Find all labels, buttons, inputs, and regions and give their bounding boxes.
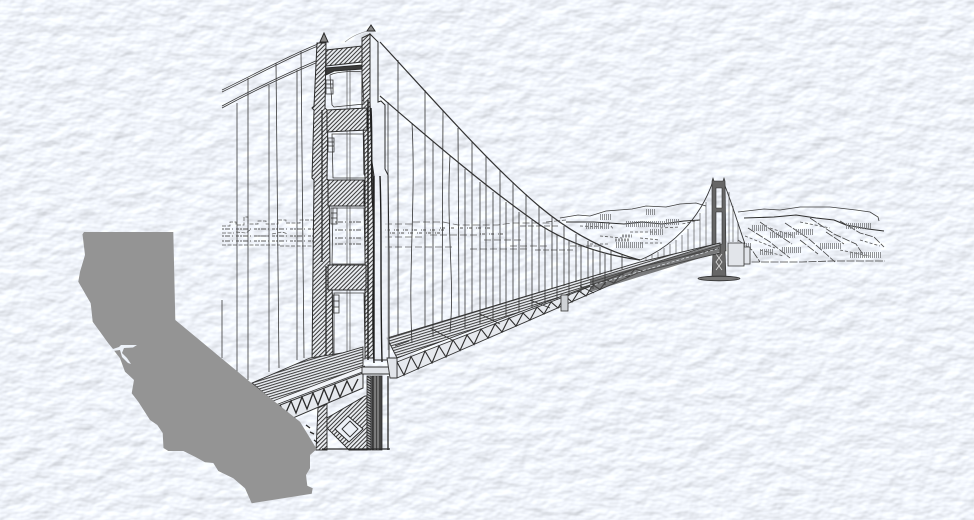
hangers — [398, 60, 622, 335]
bridge: near tower — [312, 25, 389, 365]
tower ladder details — [326, 80, 339, 313]
bridge: near deck left of tower — [252, 347, 397, 418]
bridge: tower base below deck — [306, 376, 390, 450]
tower collar at deck — [362, 367, 392, 374]
dark far deck — [590, 244, 720, 292]
far tower cables — [640, 181, 745, 260]
base right columns — [367, 376, 371, 450]
far tower legs — [710, 178, 728, 279]
window hangers — [347, 66, 350, 355]
deck continuation past tower — [387, 358, 397, 378]
upper main cable — [380, 42, 640, 260]
cross bracing — [327, 396, 367, 450]
far tower base — [698, 276, 740, 281]
deck surface — [387, 243, 720, 358]
bridge: suspension cables right of near tower — [380, 42, 640, 350]
bridge: suspension cables left of near tower — [222, 30, 372, 380]
tower strut 3 — [328, 180, 364, 206]
ground strokes — [306, 425, 390, 449]
lower main cable — [380, 96, 640, 260]
near side truss — [275, 373, 363, 418]
left lower cable — [222, 60, 318, 108]
city skyline behind the bridge — [222, 217, 600, 250]
tower inner dark lines — [368, 100, 382, 363]
mid deck pier joint — [561, 295, 568, 311]
left tower leg — [312, 43, 333, 365]
tower strut 1 — [326, 46, 362, 66]
right tower leg: pale front face — [370, 34, 389, 360]
tower strut 2 — [327, 108, 367, 132]
far tower pier block — [728, 243, 750, 266]
left upper cable — [222, 44, 318, 92]
bridge: far tower — [640, 178, 750, 281]
tower windows — [330, 71, 365, 359]
right tower leg: hatched inner face — [362, 34, 374, 358]
map: San Francisco Bay inlet — [108, 343, 137, 364]
near deck front rail — [272, 368, 365, 403]
left hangers — [222, 51, 304, 380]
tower strut 4 — [328, 265, 366, 290]
side truss — [397, 248, 720, 378]
deck cross-beams — [395, 286, 594, 346]
distant hills — [560, 203, 885, 262]
base left column — [316, 404, 327, 450]
bridge: long deck span with truss — [387, 243, 720, 378]
map: California silhouette — [78, 232, 317, 503]
tower upper spikes — [320, 25, 375, 42]
near deck surface — [252, 347, 363, 403]
